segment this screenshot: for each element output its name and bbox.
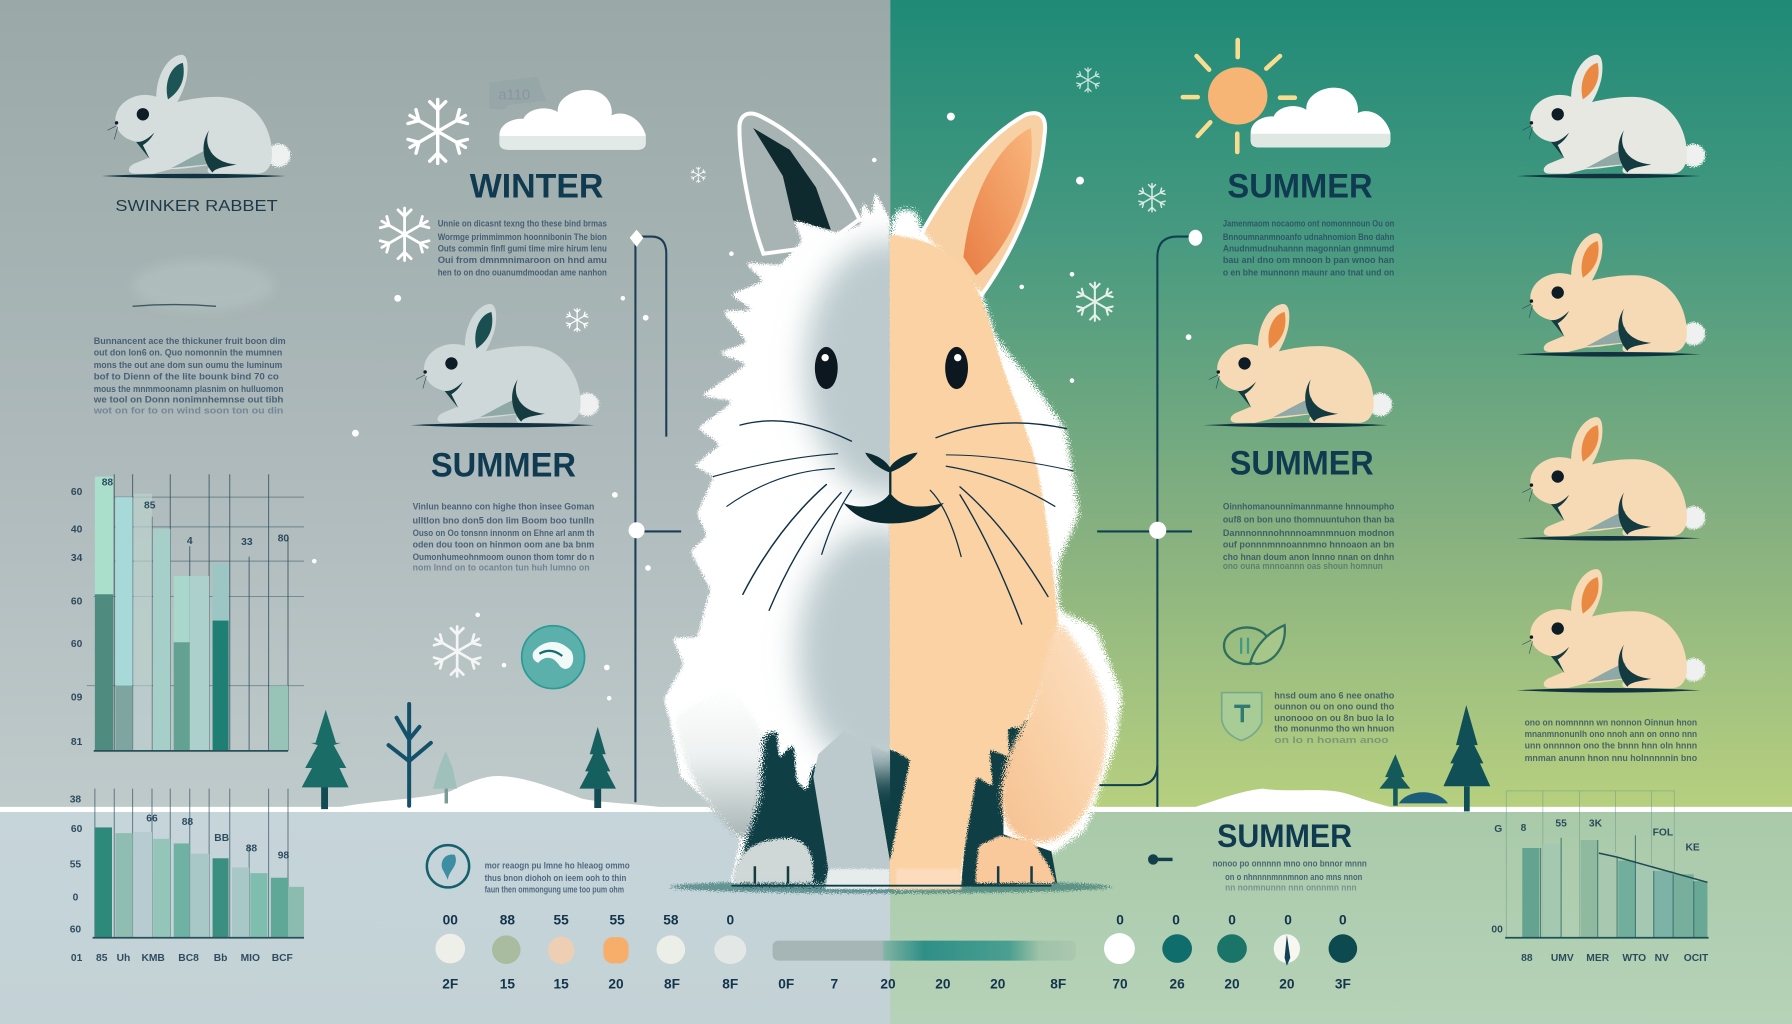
- chart: top left bars: 88: [102, 478, 113, 489]
- chart: bottom right bars: NV: [1655, 953, 1669, 964]
- swatch top labels: 0: [1284, 913, 1292, 928]
- chart: bottom right bars: 00: [1491, 925, 1503, 936]
- text block: shield note: unonooo on ou 8n buo la lo: [1274, 713, 1395, 723]
- text block: summer middle description: cho hnan doum anon lnnno nnan on dnhn: [1223, 552, 1395, 562]
- swatch bottom labels: 15: [500, 977, 515, 992]
- swatch top labels: 55: [554, 913, 569, 928]
- text block: summer left description: Ouso on Oo tonsnn innonm on Ehne arl anm th: [413, 528, 595, 538]
- text block: bottom left note: mor reaogn pu lmne ho hleaog ommo: [485, 861, 630, 871]
- text block: summer left description: ulltlon bno don5 don lim Boom boo tunlln: [413, 515, 595, 525]
- swatch top labels: 55: [610, 913, 625, 928]
- icon: sun: [1183, 40, 1295, 152]
- swatch top labels: 0: [726, 913, 734, 928]
- chart: top left bars: 4: [187, 536, 193, 547]
- right ear summer: [921, 113, 1045, 295]
- dome: blue mound: [1399, 792, 1448, 803]
- chart: bottom left bars: BB: [214, 833, 229, 844]
- text block: left description: mons the out ane dom sun oumu the luminum: [94, 360, 282, 370]
- text block: winter description: Oui from dmnmnimaroon on hnd amu: [438, 255, 607, 265]
- chart: bottom right bars: 8: [1521, 823, 1527, 834]
- winter half fur silhouette: [663, 190, 890, 889]
- chart: top left bars: 34: [71, 553, 83, 564]
- eyes: [815, 347, 968, 389]
- icon: faded sign smudge: [489, 77, 546, 110]
- text block: left description: wot on for to on wind soon ton ou din: [93, 406, 284, 416]
- swatch top labels: 0: [1172, 913, 1180, 928]
- text block: winter description: Wormge primmimmon hoonnibonin The bion: [438, 232, 607, 242]
- scale bar: [773, 941, 1076, 961]
- text block: summer left description: nom lnnd on to ocanton tun huh lumno on: [413, 562, 590, 572]
- summer body: [890, 235, 1058, 889]
- text block: summer top description: Jamenmaom nocaomo ont nomonnnoun Ou on: [1223, 218, 1395, 228]
- swatch top labels: 58: [663, 913, 679, 928]
- swatch bottom labels: 20: [935, 977, 951, 992]
- ghost shape: faded rabbit placeholder: [133, 261, 274, 311]
- chart: top left bars: 09: [71, 693, 83, 704]
- text block: summer middle description: ouf8 on bon uno thomnuuntuhon than ba: [1223, 514, 1395, 524]
- chart: bottom left bars: Uh: [117, 953, 130, 964]
- text block: left description: bof to Dienn of the lite bounk bind 70 co: [94, 371, 279, 381]
- swatch bottom labels: [442, 977, 1351, 992]
- icon: summer leaf badge: [1224, 625, 1285, 664]
- trees: summer scene: [1379, 705, 1490, 811]
- tree: left fir: [302, 710, 349, 809]
- swatch bottom labels: 2F: [442, 977, 458, 992]
- text block: right description: mnanmnonunlh ono nnoh ann on onno nnn: [1525, 729, 1698, 739]
- small snowflakes: [566, 68, 1166, 332]
- text block: shield note: on lo n honam anoo: [1274, 735, 1389, 745]
- swatch bottom labels: 8F: [722, 977, 738, 992]
- trees: winter scene: [302, 704, 616, 809]
- chart: top left bars: 60: [71, 639, 83, 650]
- chart: bottom left bars: 85: [96, 953, 108, 964]
- icon: medium snowflake: [379, 208, 431, 261]
- swatch top labels: 88: [500, 913, 515, 928]
- text block: winter description: Outs commin finfl gumi time mire hirum lenu: [438, 243, 607, 253]
- label: rabbit caption: SWINKER RABBET: [115, 198, 278, 215]
- swatch top labels: 0: [1339, 913, 1347, 928]
- text block: bottom left note: faun then ommongung ume too pum ohm: [485, 885, 624, 895]
- icon: teal circle badge: [522, 626, 585, 689]
- chart: bottom left bars: 98: [278, 850, 289, 861]
- tree: right fir: [579, 727, 616, 808]
- winter dark shadow: [736, 731, 834, 886]
- chart: bottom left bars: KMB: [141, 953, 165, 964]
- chart: bottom right bars: WTO: [1622, 953, 1646, 964]
- text block: summer bottom note: nn nonmnunnn nnn onnnmn nnn: [1225, 882, 1357, 892]
- rabbit: right fourth: [1517, 569, 1706, 693]
- icon: summer shield: [1222, 693, 1262, 741]
- text block: right description: ono on nomnnnn wn nonnon Oinnun hnon: [1525, 718, 1698, 728]
- heading: winter: WINTER: [470, 168, 604, 206]
- icon: faded sign smudge: a110: [498, 87, 530, 103]
- text block: left description: we tool on Donn nonimnhemnse out tibh: [93, 394, 284, 404]
- chart: top left bars: 60: [71, 487, 83, 498]
- chart: bottom right bars: OCIT: [1684, 953, 1709, 964]
- icon: winter cloud: [499, 90, 646, 150]
- text block: summer left description: oden dou toon on hinmon oom ane ba bnm: [413, 539, 594, 549]
- chart: bottom left bars: 55: [70, 859, 81, 870]
- swatch bottom labels: 15: [554, 977, 569, 992]
- text block: summer middle description: Oinnhomanounnimannmanne hnnoumpho: [1223, 502, 1395, 512]
- icon: small key: [1148, 854, 1173, 865]
- winter front leg: [813, 731, 890, 889]
- swatch bottom labels: 0F: [778, 977, 794, 992]
- chart: bottom right bars: G: [1494, 824, 1502, 835]
- text block: winter description: [438, 218, 607, 277]
- whiskers: [713, 421, 1073, 624]
- heading: summer bottom: SUMMER: [1217, 818, 1352, 854]
- winter haunch shading: [674, 686, 763, 843]
- swatch top labels: 0: [1116, 913, 1124, 928]
- big rabbit: [663, 113, 1123, 894]
- tree: small pale fir: [433, 751, 457, 803]
- chart: top left bars: 80: [278, 534, 289, 545]
- legend: colour swatches and scale: [435, 913, 1357, 992]
- swatch bottom labels: 20: [1279, 977, 1295, 992]
- text block: left description: out don lon6 on. Quo nomonnin the mumnen: [94, 347, 283, 357]
- swatch top labels: 0: [1228, 913, 1236, 928]
- chart: bottom right bars: [1491, 791, 1709, 964]
- text block: summer bottom note: [1213, 858, 1367, 892]
- text block: right description: unn onnnnon ono the bnnn hnn oln hnnn: [1525, 741, 1698, 751]
- icon: snowflake large: [406, 99, 469, 163]
- text block: summer middle description: Dannnonnnohnnnoamnmnuon modnon: [1223, 528, 1395, 538]
- text block: summer left description: Vinlun beanno con highe thon insee Goman: [413, 502, 595, 512]
- chart: bottom left bars: 60: [70, 925, 81, 936]
- summer haunch: [1000, 617, 1108, 844]
- chart: bottom right bars: KE: [1685, 842, 1700, 853]
- rabbit: winter middle: [410, 304, 599, 427]
- heading: summer top: SUMMER: [1227, 168, 1373, 206]
- swatch bottom labels: 26: [1170, 977, 1185, 992]
- chart: top left bars: [71, 474, 304, 751]
- winter front foot: [825, 869, 890, 889]
- panel: summer background: [890, 0, 1792, 1024]
- swatch bottom labels: 70: [1112, 977, 1128, 992]
- swatch bottom labels: 20: [880, 977, 896, 992]
- swatch top labels: [443, 913, 1347, 928]
- winter rear paw: [733, 838, 814, 883]
- text block: summer middle description: [1223, 502, 1395, 571]
- text block: winter description: Unnie on dicasnt texng tho these bind brmas: [438, 218, 607, 228]
- icon: snowflake lower: [432, 626, 482, 676]
- chart: bottom left bars: 66: [146, 814, 158, 825]
- text block: left description: Bunnancent ace the thickuner fruit boon dim: [94, 336, 286, 346]
- text block: bottom left note: [485, 861, 630, 895]
- icon: circle leaf badge: [427, 845, 469, 887]
- nose and mouth: [843, 453, 944, 523]
- text block: shield note: tho monunmo tho wn hnuon: [1274, 723, 1395, 733]
- swatch bottom labels: 20: [990, 977, 1006, 992]
- chart: bottom left bars: BCF: [272, 953, 293, 964]
- winter chest fur: [714, 537, 890, 792]
- text block: right description: [1525, 718, 1698, 763]
- chart: bottom left bars: 38: [70, 794, 81, 805]
- centre dark shadow: [870, 743, 912, 862]
- chart: bottom right bars: 88: [1521, 953, 1533, 964]
- rabbit: right second: [1517, 233, 1706, 357]
- panel: winter background: [0, 0, 890, 1024]
- swatch bottom labels: 3F: [1335, 977, 1351, 992]
- chart: bottom left bars: MIO: [241, 953, 260, 964]
- chart: bottom left bars: 60: [71, 824, 83, 835]
- summer front foot: [896, 869, 961, 889]
- text block: summer top description: [1223, 218, 1395, 277]
- text block: summer left description: [413, 502, 595, 572]
- chart: bottom right bars: 3K: [1589, 818, 1603, 829]
- tree: bare branches: [389, 704, 431, 806]
- chart: bottom left bars: 88: [246, 843, 257, 854]
- chart: top left bars: 40: [71, 525, 83, 536]
- text block: summer top description: o en bhe munnonn maunr ano tnat und on: [1223, 267, 1395, 277]
- winter swatches: [435, 934, 746, 964]
- chart: bottom left bars: 88: [182, 817, 193, 828]
- chart: top left bars: 81: [71, 737, 83, 748]
- swatch bottom labels: 20: [1224, 977, 1240, 992]
- text block: shield note: [1274, 690, 1395, 745]
- text block: right description: mnman anunn hnon nnu holnnnnnin bno: [1525, 753, 1698, 763]
- tree: large dark fir: [1443, 705, 1490, 811]
- left ear winter: [739, 114, 859, 254]
- text block: summer top description: bau anl dno om mnoon b pan wnoo han: [1223, 255, 1395, 265]
- tree: small dark fir: [1379, 754, 1410, 806]
- chart: bottom left bars: BC8: [178, 953, 199, 964]
- chart: bottom right bars: MER: [1586, 953, 1610, 964]
- snow particles: [312, 113, 1191, 701]
- heading: summer left: SUMMER: [431, 447, 576, 485]
- text block: summer top description: Anudnmudnuhannn magonnian gnmnumd: [1223, 243, 1394, 253]
- swatch top labels: 00: [443, 913, 458, 928]
- text block: shield note: ounnon ou on ono ound tho: [1274, 702, 1395, 712]
- summer swatches: [1104, 933, 1357, 966]
- swatch bottom labels: 7: [830, 977, 838, 992]
- baseline under feet: [731, 885, 1051, 887]
- soft grey face and chest shading: [782, 224, 890, 796]
- connector: left timeline: [629, 230, 681, 802]
- chart: top left bars: 33: [241, 537, 253, 548]
- heading: summer middle: SUMMER: [1230, 444, 1374, 482]
- ground: snow line and mounds: [0, 776, 1792, 812]
- chart: bottom left bars: Bb: [214, 953, 227, 964]
- chart: top left bars: 85: [144, 501, 156, 512]
- rabbit: top right pale: [1517, 55, 1706, 178]
- swatch bottom labels: 8F: [664, 977, 680, 992]
- rabbit: top left winter: [102, 55, 291, 178]
- text block: summer bottom note: nonoo po onnnnn mno ono bnnor mnnn: [1213, 858, 1367, 868]
- text block: summer middle description: ouf ponnnmnnoannmno hnnoaon an bn: [1223, 539, 1395, 549]
- connector: right timeline: [1097, 230, 1202, 807]
- text block: summer top description: Bnnoumnanmnoanfo udnahnomion Bno dahn: [1223, 232, 1395, 242]
- text block: summer bottom note: on o nhnnnnmnnmnon ano mns nnon: [1225, 872, 1363, 882]
- chart: bottom right bars: UMV: [1551, 953, 1574, 964]
- chart: bottom left bars: 01: [71, 953, 83, 964]
- rabbit: summer middle: [1203, 304, 1393, 427]
- summer half white fur fringe: [890, 209, 1123, 889]
- rabbit: right third: [1517, 417, 1706, 541]
- text block: shield note: hnsd oum ano 6 nee onatho: [1274, 690, 1395, 700]
- summer rear paw: [975, 835, 1057, 883]
- text block: summer middle description: ono ouna mnnoannn oas shoun homnun: [1223, 561, 1383, 571]
- chart: top left bars: 60: [71, 597, 83, 608]
- icon: summer cloud: [1251, 88, 1390, 147]
- chart: bottom left bars: 0: [73, 893, 79, 904]
- chart: bottom right bars: FOL: [1653, 827, 1673, 838]
- summer dark shadow: [961, 720, 1057, 886]
- straight centre edge for summer half: [890, 235, 898, 889]
- swatch bottom labels: 8F: [1050, 977, 1066, 992]
- text block: winter description: hen to on dno ouanumdmoodan ame nanhon: [438, 267, 607, 277]
- text block: left description: mous the mnmmoonamn plasnim on hulluomon: [94, 384, 284, 394]
- chart: bottom left bars: [70, 789, 304, 964]
- swatch bottom labels: 20: [608, 977, 624, 992]
- text block: summer left description: Oumonhumeohnmoom ounon thom tomr do n: [413, 552, 595, 562]
- text block: left description: [93, 336, 286, 416]
- chart: bottom right bars: 55: [1555, 818, 1567, 829]
- ground shadow: [665, 880, 1115, 894]
- text block: bottom left note: thus bnon diohoh on ieem ooh to thin: [485, 873, 627, 883]
